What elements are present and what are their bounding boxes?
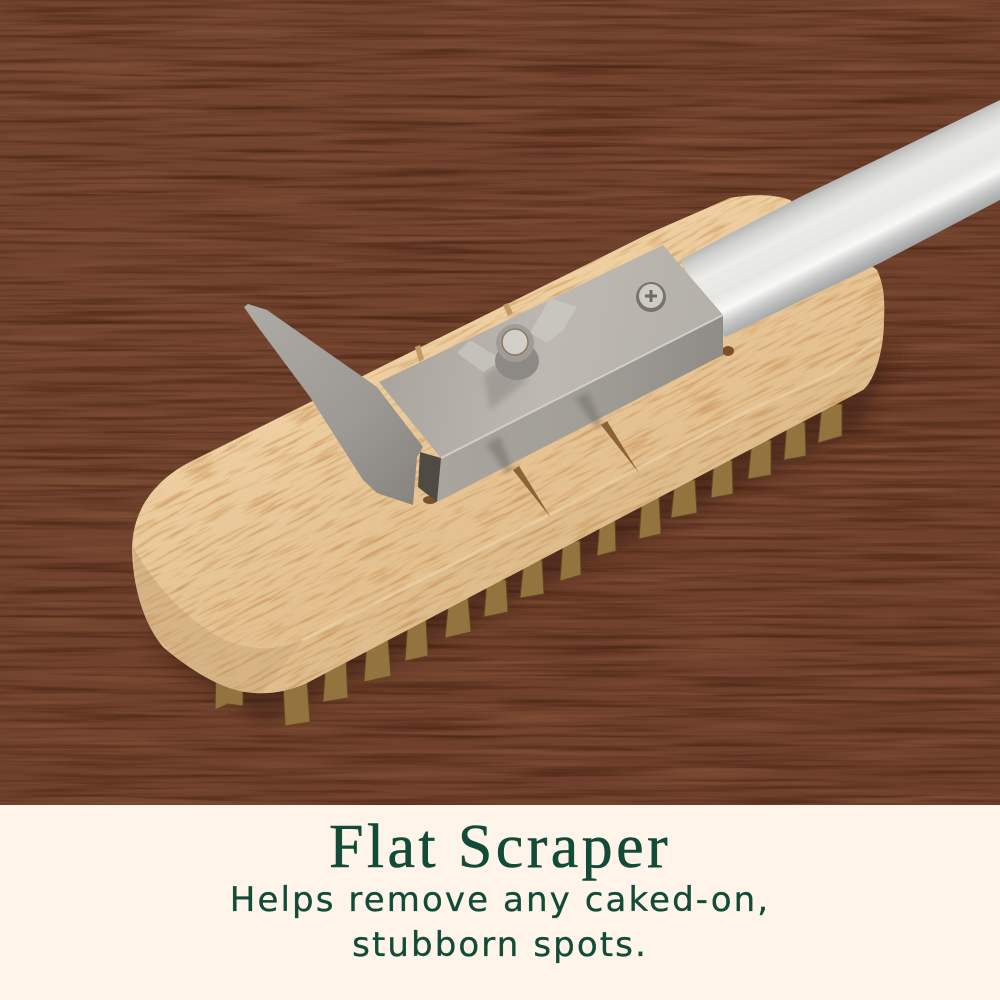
screw [636, 282, 666, 312]
brush wooden block [132, 195, 884, 694]
heading: Flat Scraper [329, 813, 671, 881]
subtitle: Helps remove any caked-on, [230, 880, 770, 920]
bristle reflections [486, 436, 512, 473]
brass bristles [215, 404, 842, 726]
wood notches [415, 303, 513, 362]
wing nut [457, 298, 577, 410]
caption panel [0, 805, 1000, 1000]
wood grain texture [132, 196, 884, 693]
screw holes [423, 346, 734, 504]
scraper blade [244, 304, 423, 505]
bracket top face [379, 245, 723, 458]
aluminium handle [680, 100, 1000, 337]
block top face [133, 195, 883, 602]
brush shadow [150, 340, 900, 725]
steel bracket [379, 245, 723, 502]
bracket end [418, 452, 441, 502]
subtitle [230, 880, 770, 965]
side shading [133, 547, 303, 696]
face edge highlight [303, 338, 880, 640]
bracket front face [437, 315, 723, 502]
block side face [120, 180, 900, 710]
subtitle: stubborn spots. [352, 925, 648, 965]
slots in wood [513, 421, 639, 518]
bracket fold highlight [441, 315, 723, 458]
